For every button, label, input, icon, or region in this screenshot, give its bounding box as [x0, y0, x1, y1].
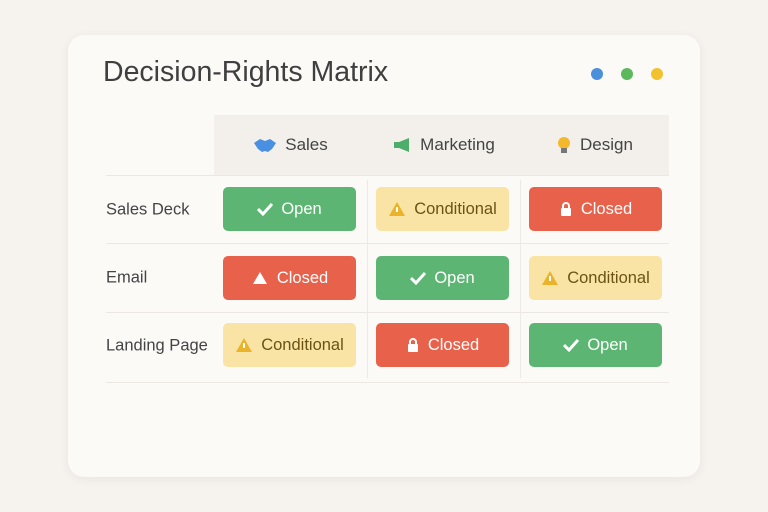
row 3 pills [223, 323, 356, 367]
header: Sales: Sales [285, 135, 328, 154]
row 2 pills [223, 256, 356, 300]
text: Closed [428, 336, 479, 354]
text: Closed [581, 200, 632, 218]
text: Conditional [414, 200, 497, 218]
title: Decision-Rights Matrix [103, 56, 388, 88]
row labels: Sales Deck [106, 200, 189, 218]
header: Design: Design [580, 135, 633, 154]
text: Conditional [567, 268, 650, 286]
window dots [591, 68, 663, 80]
row 2 pills: Closed [277, 268, 328, 286]
text: Open [587, 336, 628, 354]
row 3 pills: Conditional [261, 336, 344, 354]
text: Landing Page [106, 336, 208, 354]
card [68, 35, 700, 477]
row 1 pills [223, 187, 356, 231]
header: Marketing: Marketing [420, 135, 495, 154]
text: Email [106, 268, 147, 286]
header band [214, 115, 669, 175]
header: Sales [254, 135, 328, 154]
row 1 pills: Open [281, 200, 322, 218]
text: Open [434, 268, 475, 286]
